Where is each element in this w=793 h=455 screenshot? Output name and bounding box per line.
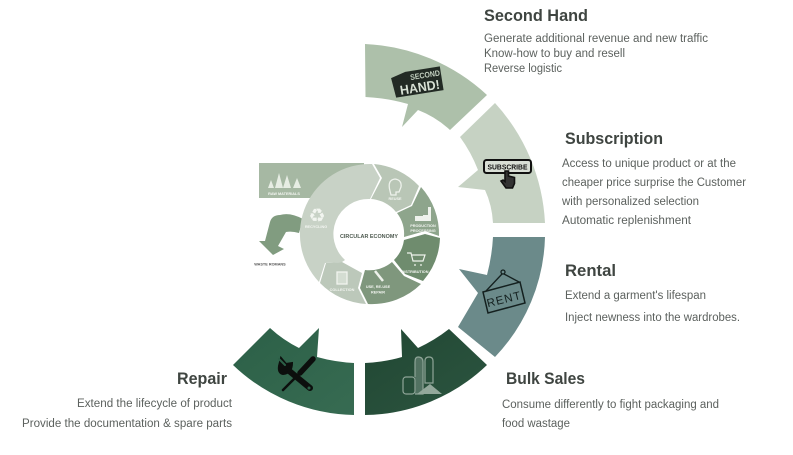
segment: recycling: RECYCLING: [305, 225, 327, 229]
text: subscription: with personalized selection: [561, 196, 699, 208]
icon: second hand badge: HAND!: [399, 77, 441, 98]
icon: second hand badge: [390, 66, 444, 99]
segment: distribution: [394, 234, 440, 281]
text: bulk sales: food wastage: [502, 418, 570, 430]
text: bulk sales: [502, 369, 719, 430]
text: second hand: [484, 6, 708, 75]
circular economy diagram: [254, 163, 440, 304]
icon: cart: [407, 253, 425, 265]
text: second hand: Reverse logistic: [484, 63, 562, 75]
text: rental: Extend a garment's lifespan: [565, 290, 706, 302]
text: second hand: Know-how to buy and resell: [484, 48, 625, 60]
text: rental: [565, 261, 740, 324]
text: subscription: Access to unique product or at the: [562, 158, 736, 170]
segment: bulk sales: [365, 329, 487, 415]
icon: wrench: [375, 271, 383, 281]
segment: use reuse repair: REPAIR: [371, 290, 385, 294]
segment: production: [397, 187, 439, 237]
segment: use reuse repair: USE, RE-USE: [366, 285, 391, 289]
text: bulk sales: Consume differently to fight packaging and: [502, 399, 719, 411]
segment: production: PRODUCTION: [410, 224, 436, 228]
segment: subscription: [458, 103, 545, 223]
segment: rental: [458, 237, 545, 357]
text: bulk sales: Bulk Sales: [506, 369, 585, 388]
icon: factory: [415, 207, 431, 221]
icon: head: [389, 179, 401, 195]
segment: second hand: [365, 44, 487, 130]
icon: second hand badge: SECOND: [410, 68, 441, 82]
text: subscription: Subscription: [565, 129, 663, 148]
icon: bin: [337, 272, 347, 284]
text: repair: [22, 369, 233, 430]
waste arrow: [254, 214, 303, 266]
raw materials panel: RAW MATERIALS: [268, 192, 300, 196]
text: repair: Repair: [177, 369, 227, 388]
text: second hand: Generate additional revenue and new traffic: [484, 33, 708, 45]
text: subscription: cheaper price surprise the Customer: [562, 177, 746, 189]
segment: collection: [320, 262, 366, 304]
segment: reuse: [371, 164, 419, 212]
segment: repair: [233, 328, 354, 415]
text: rental: Inject newness into the wardrobes.: [565, 312, 740, 324]
icon: tools: [279, 358, 313, 390]
text: subscription: Automatic replenishment: [562, 215, 692, 227]
segment: collection: COLLECTION: [330, 288, 355, 292]
text: repair: Provide the documentation & spare parts: [22, 418, 232, 430]
raw materials panel: [259, 163, 364, 198]
center label: CIRCULAR ECONOMY: [340, 234, 398, 240]
text: rental: Rental: [565, 261, 616, 280]
text: second hand: Second Hand: [484, 6, 588, 25]
text: repair: Extend the lifecycle of product: [77, 398, 233, 410]
segment: use reuse repair: [360, 262, 421, 304]
icon: rent sign: RENT: [486, 290, 523, 310]
segment: reuse: REUSE: [388, 197, 402, 201]
segment: production: PROCESSING: [410, 229, 436, 233]
icon: bottles: [403, 357, 442, 394]
icon: subscribe button: SUBSCRIBE: [488, 164, 528, 172]
text: subscription: [561, 129, 746, 227]
segment: distribution: DISTRIBUTION: [402, 270, 429, 274]
icon: recycle: ♻: [308, 206, 326, 227]
segment: recycling: [300, 164, 380, 282]
waste arrow: WASTE ROMANS: [254, 262, 286, 266]
